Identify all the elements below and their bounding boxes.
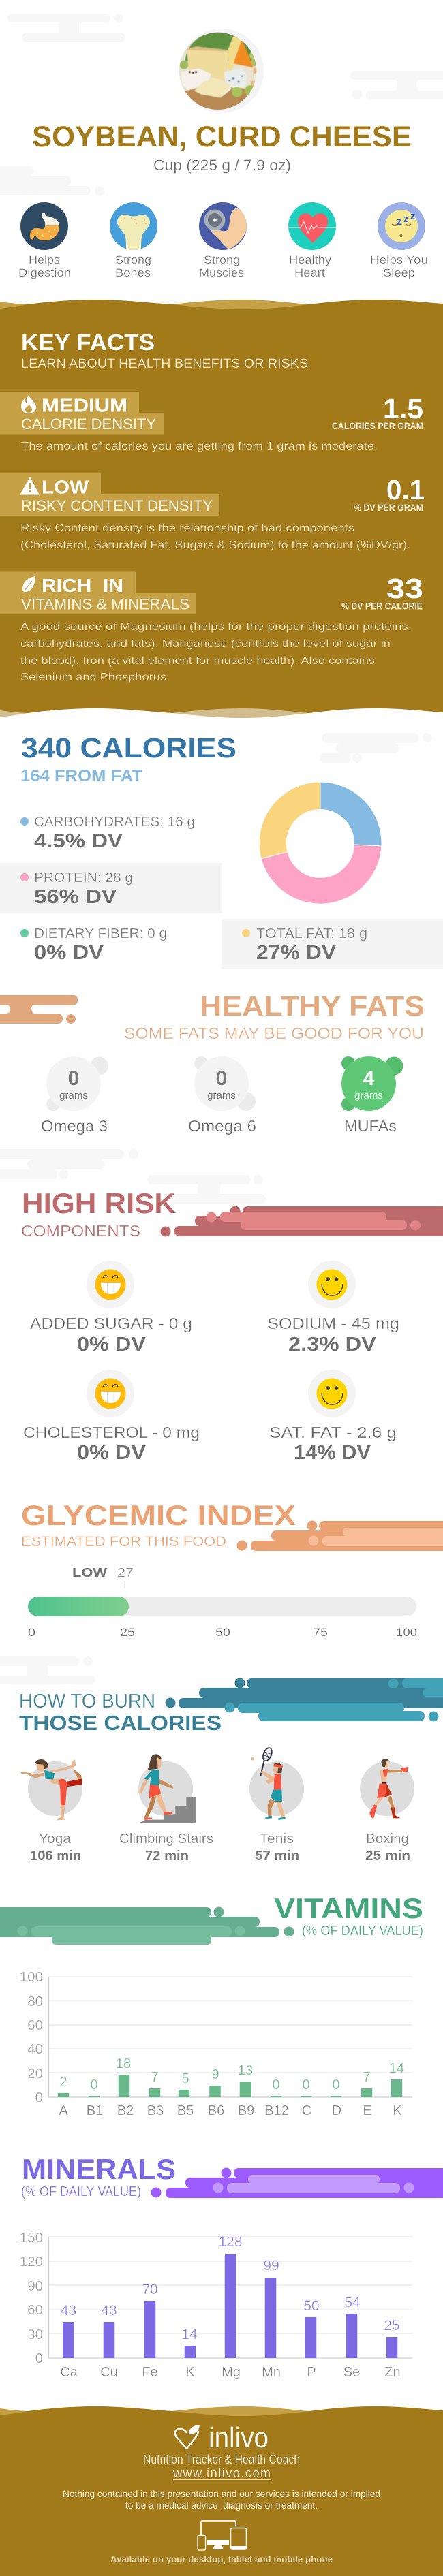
icon: stomach [20, 202, 68, 250]
activity: yoga [21, 1759, 82, 1864]
label: helps you sleep: Helps You [370, 253, 428, 266]
item: added sugar: ADDED SUGAR - 0 g [30, 1315, 192, 1332]
item: cholesterol [23, 1370, 200, 1464]
subheading: (% OF DAILY VALUE) [302, 1923, 423, 1938]
stat: omega 3: grams [59, 1090, 88, 1101]
activity: yoga: 106 min [30, 1849, 81, 1864]
disclaimer: to be a medical advice, diagnosis or treatment. [125, 2500, 318, 2511]
gauge label: 27 [117, 1566, 134, 1580]
activity: boxing: 25 min [365, 1849, 410, 1864]
gauge scale: 0 [28, 1626, 35, 1639]
bar chart: minerals: 43 [61, 2303, 76, 2319]
bar chart: vitamins: 0 [302, 2077, 310, 2092]
stat: mufas: grams [354, 1090, 383, 1101]
bar chart: vitamins: 9 [211, 2067, 219, 2082]
website: www.inlivo.com [172, 2466, 271, 2480]
icon: desktop, tablet and phone [198, 2521, 247, 2550]
legend: protein [20, 870, 133, 908]
bar chart: vitamins: C [302, 2103, 311, 2118]
availability note: Available on your desktop, tablet and mobile phone [110, 2554, 333, 2564]
label: healthy heart: Heart [294, 266, 325, 279]
figure: climbing stairs [138, 1754, 196, 1823]
activity: climbing stairs: Climbing Stairs [119, 1832, 213, 1847]
description [20, 621, 412, 683]
bar chart: minerals: P [307, 2365, 316, 2380]
bar chart: vitamins: 7 [363, 2070, 371, 2085]
label: strong muscles: Muscles [199, 266, 244, 279]
legend: dietary fiber [20, 926, 167, 964]
heading: key facts: KEY FACTS [21, 330, 155, 355]
legend: dietary fiber: 0% DV [34, 942, 104, 964]
panel: vitamins [0, 1892, 423, 2118]
activity: tennis [249, 1746, 304, 1864]
activity: tennis: Tenis [260, 1832, 294, 1847]
icon: smiling emoji [316, 1379, 348, 1409]
bar chart: minerals: Mg [222, 2365, 241, 2380]
unit: CALORIES PER GRAM [332, 421, 423, 431]
value: 0.1 [386, 474, 425, 505]
legend: carbohydrates: CARBOHYDRATES: 16 g [34, 815, 195, 830]
legend: total fat [242, 926, 367, 964]
bar chart: minerals: 150 [20, 2230, 43, 2246]
stat: mufas: 4 [363, 1067, 375, 1090]
label: helps digestion: Digestion [18, 266, 71, 279]
bar chart: vitamins: 60 [27, 2017, 43, 2033]
description: Risky Content density is the relationship of bad components [20, 522, 354, 534]
bar chart: minerals: Se [343, 2365, 360, 2380]
gauge label [72, 1566, 134, 1588]
gauge scale: 50 [215, 1626, 230, 1639]
icon: sleeping face: z [397, 216, 402, 227]
figure: yoga pose [21, 1759, 82, 1820]
decorative blob [161, 1206, 443, 1237]
label: helps digestion: Helps [29, 253, 60, 266]
bar chart: minerals: 54 [344, 2295, 361, 2310]
icon: leaf [22, 576, 35, 592]
activity: tennis: 57 min [255, 1849, 299, 1864]
bar chart: minerals: 50 [303, 2298, 320, 2314]
label: CALORIE DENSITY [21, 415, 156, 433]
stat: omega 6 [188, 1056, 256, 1135]
item: added sugar [30, 1261, 192, 1355]
item: sodium: 2.3% DV [288, 1334, 377, 1355]
bar chart: minerals: 128 [218, 2234, 243, 2250]
bar chart: vitamins: B9 [238, 2103, 254, 2118]
bar chart: minerals: 90 [27, 2278, 43, 2294]
stat: omega 3 [41, 1056, 108, 1135]
subheading: from fat: 164 FROM FAT [20, 767, 142, 785]
bar chart: minerals: Ca [60, 2365, 78, 2380]
gauge scale: 75 [313, 1626, 328, 1639]
subheading: ESTIMATED FOR THIS FOOD [21, 1534, 226, 1550]
icon: muscle with weight [199, 202, 247, 250]
logo: inlivo [175, 2421, 269, 2453]
unit: % DV PER GRAM [354, 503, 423, 513]
gauge scale: 25 [120, 1626, 135, 1639]
bar chart: vitamins: 2 [59, 2075, 67, 2090]
subheading: COMPONENTS [21, 1222, 140, 1240]
icon: flame [21, 395, 36, 413]
stat: omega 3: 0 [68, 1067, 79, 1090]
figure: tennis player [251, 1746, 286, 1820]
activity: climbing stairs [119, 1754, 213, 1864]
subheading: SOME FATS MAY BE GOOD FOR YOU [124, 1024, 424, 1042]
bar chart: vitamins: B3 [147, 2103, 164, 2118]
panel: high risk components [21, 1187, 443, 1464]
activity: climbing stairs: 72 min [145, 1849, 189, 1864]
label: VITAMINS & MINERALS [21, 595, 189, 613]
bar chart: minerals: 0 [35, 2351, 43, 2366]
legend: dietary fiber: DIETARY FIBER: 0 g [34, 926, 167, 941]
description: Selenium and Phosphorus. [20, 672, 170, 683]
label: strong muscles: Strong [204, 253, 240, 266]
item: sodium [267, 1261, 399, 1355]
bar chart: vitamins: D [332, 2103, 341, 2118]
label: strong muscles [199, 253, 244, 279]
icon: sleeping face [378, 202, 425, 250]
bar chart: minerals: 14 [181, 2327, 198, 2342]
heading line two: THOSE CALORIES [19, 1711, 222, 1735]
panel: glycemic index [21, 1499, 443, 1639]
description: The amount of calories you are getting from 1 gram is moderate. [21, 441, 378, 452]
disclaimer: Nothing contained in this presentation and our services is intended or implied [63, 2488, 380, 2499]
unit: % DV PER CALORIE [341, 601, 423, 612]
decorative blob [0, 995, 78, 1024]
donut chart [259, 782, 382, 904]
bar chart: vitamins: K [393, 2103, 402, 2118]
decorative blob [151, 2167, 443, 2198]
item: added sugar: 0% DV [77, 1334, 147, 1355]
label: healthy heart: Healthy [289, 253, 332, 266]
bar chart: minerals: 120 [20, 2254, 43, 2269]
stat: mufas: MUFAs [344, 1117, 397, 1135]
description: A good source of Magnesium (helps for the proper digestion proteins, [20, 621, 412, 633]
fact: vitamins and minerals [0, 572, 423, 683]
label: RISKY CONTENT DENSITY [21, 497, 213, 514]
legend: total fat: 27% DV [256, 942, 337, 964]
description: carbohydrates, and fats), Manganese (controls the level of sugar in [20, 638, 391, 650]
label: helps digestion [18, 253, 71, 279]
bar chart: minerals: 43 [101, 2303, 117, 2319]
bar chart: vitamins: 20 [27, 2066, 43, 2082]
label: helps you sleep [370, 253, 428, 279]
bar chart: vitamins: B2 [117, 2103, 134, 2118]
heading line one: HOW TO BURN [19, 1691, 155, 1712]
activity: boxing: Boxing [366, 1832, 409, 1847]
description: the blood), Iron (a vital element for muscle health). Also contains [20, 655, 375, 667]
stat: omega 3: Omega 3 [41, 1117, 108, 1135]
bar chart: vitamins: 0 [35, 2090, 43, 2105]
activity: yoga: Yoga [39, 1832, 72, 1847]
fact: risky content density [0, 473, 425, 551]
decorative blob [0, 1907, 294, 1945]
stat: omega 6: grams [207, 1090, 236, 1101]
heading: HIGH RISK [22, 1187, 176, 1219]
heading: 340 calories: 340 CALORIES [21, 732, 236, 764]
bar chart: vitamins: 40 [27, 2041, 43, 2057]
bar chart: vitamins: B6 [208, 2103, 224, 2118]
stat: mufas [341, 1056, 403, 1135]
activity: boxing [360, 1759, 414, 1864]
bar chart: vitamins: 7 [151, 2070, 159, 2085]
bar chart: minerals: 60 [27, 2302, 43, 2318]
description [20, 522, 410, 551]
bar chart: minerals: K [185, 2365, 195, 2380]
bar chart: vitamins: 80 [27, 1994, 43, 2009]
legend: carbohydrates [20, 815, 195, 852]
rating: MEDIUM [42, 395, 127, 415]
item: cholesterol: 0% DV [77, 1442, 147, 1464]
bar chart: vitamins: 0 [272, 2077, 280, 2092]
icon: warning triangle [20, 477, 39, 494]
label: healthy heart [289, 253, 332, 279]
icon: grinning emoji [95, 1270, 125, 1300]
item: cholesterol: CHOLESTEROL - 0 mg [23, 1424, 200, 1441]
rating: RICH IN [42, 575, 123, 596]
subheading: LEARN ABOUT HEALTH BENEFITS OR RISKS [21, 356, 308, 371]
bar chart: vitamins: B5 [177, 2103, 194, 2118]
legend: carbohydrates: 4.5% DV [34, 830, 123, 852]
label: helps you sleep: Sleep [383, 266, 415, 279]
figure: boxer [369, 1759, 408, 1818]
panel: how to burn calories [19, 1678, 443, 1864]
value: 1.5 [383, 393, 423, 424]
gauge bar [28, 1597, 416, 1616]
food photo: cheese board [179, 29, 264, 113]
fact: calorie density [0, 392, 423, 452]
bar chart: minerals: 70 [142, 2282, 158, 2297]
disclaimer [63, 2488, 380, 2511]
bar chart: vitamins: 100 [20, 1969, 43, 1985]
panel: healthy fats [0, 990, 425, 1135]
heading: HEALTHY FATS [200, 990, 425, 1022]
panel: health benefits [18, 202, 428, 279]
decorative blob [237, 1520, 443, 1551]
icon: grinning emoji [95, 1379, 125, 1409]
description: (Cholesterol, Saturated Fat, Sugars & Sodium) to the amount (%DV/gr). [20, 539, 410, 551]
icon: heart with pulse [288, 202, 336, 250]
item: saturated fat [269, 1370, 397, 1464]
bar chart: vitamins: 0 [90, 2077, 98, 2092]
rating: LOW [42, 477, 89, 497]
title: SOYBEAN, CURD CHEESE [32, 121, 412, 153]
legend: protein: PROTEIN: 28 g [34, 870, 133, 885]
bar chart: vitamins: 0 [332, 2077, 340, 2092]
heading: GLYCEMIC INDEX [21, 1499, 296, 1531]
legend: total fat: TOTAL FAT: 18 g [256, 926, 367, 941]
logo: inlivo: inlivo [209, 2421, 269, 2453]
stat: omega 6: Omega 6 [188, 1117, 256, 1135]
bar chart: vitamins: B1 [87, 2103, 103, 2118]
gauge scale [28, 1626, 417, 1639]
bar chart: vitamins: 18 [116, 2056, 131, 2071]
bar chart: vitamins: A [59, 2103, 68, 2118]
item: saturated fat: SAT. FAT - 2.6 g [269, 1424, 397, 1441]
stat: omega 6: 0 [216, 1067, 227, 1090]
bar chart: vitamins: 14 [389, 2061, 404, 2076]
panel: key facts [0, 300, 443, 723]
icon: sleeping face: z [403, 213, 409, 225]
bar chart: minerals: Zn [384, 2365, 401, 2380]
bar chart: vitamins: B12 [264, 2103, 289, 2118]
subheading: (% OF DAILY VALUE) [21, 2184, 141, 2199]
icon: sleeping face: z [410, 210, 416, 222]
bar chart: minerals: 25 [384, 2318, 400, 2334]
panel: calories [0, 732, 443, 969]
serving size: Cup (225 g / 7.9 oz) [153, 157, 291, 174]
bar chart: vitamins: 13 [238, 2063, 253, 2078]
bar chart: minerals: Mn [262, 2365, 281, 2380]
icon: bone [110, 202, 157, 252]
value: 33 [386, 573, 423, 604]
label: strong bones [115, 253, 151, 279]
bar chart: minerals: Cu [100, 2365, 118, 2380]
tagline: Nutrition Tracker & Health Coach [143, 2453, 300, 2466]
heading: VITAMINS [274, 1892, 423, 1924]
icon: smiling emoji [316, 1270, 348, 1300]
bar chart: vitamins: E [363, 2103, 372, 2118]
label: strong bones: Strong [115, 253, 151, 266]
bar chart: minerals: 99 [263, 2258, 279, 2274]
bar chart: minerals [20, 2230, 412, 2380]
gauge label: LOW [72, 1566, 107, 1580]
gauge scale: 100 [396, 1626, 417, 1639]
bar chart: vitamins [20, 1969, 412, 2118]
decorative blob [165, 1678, 443, 1722]
item: sodium: SODIUM - 45 mg [267, 1315, 399, 1332]
panel: minerals [20, 2153, 443, 2380]
bar chart: minerals: Fe [142, 2365, 158, 2380]
bar chart: minerals: 30 [27, 2327, 43, 2342]
bar chart: vitamins: 5 [181, 2071, 189, 2086]
heading: MINERALS [22, 2153, 176, 2185]
panel: footer [0, 2406, 443, 2576]
legend: protein: 56% DV [34, 886, 117, 908]
label: strong bones: Bones [115, 266, 151, 279]
item: saturated fat: 14% DV [294, 1442, 371, 1464]
